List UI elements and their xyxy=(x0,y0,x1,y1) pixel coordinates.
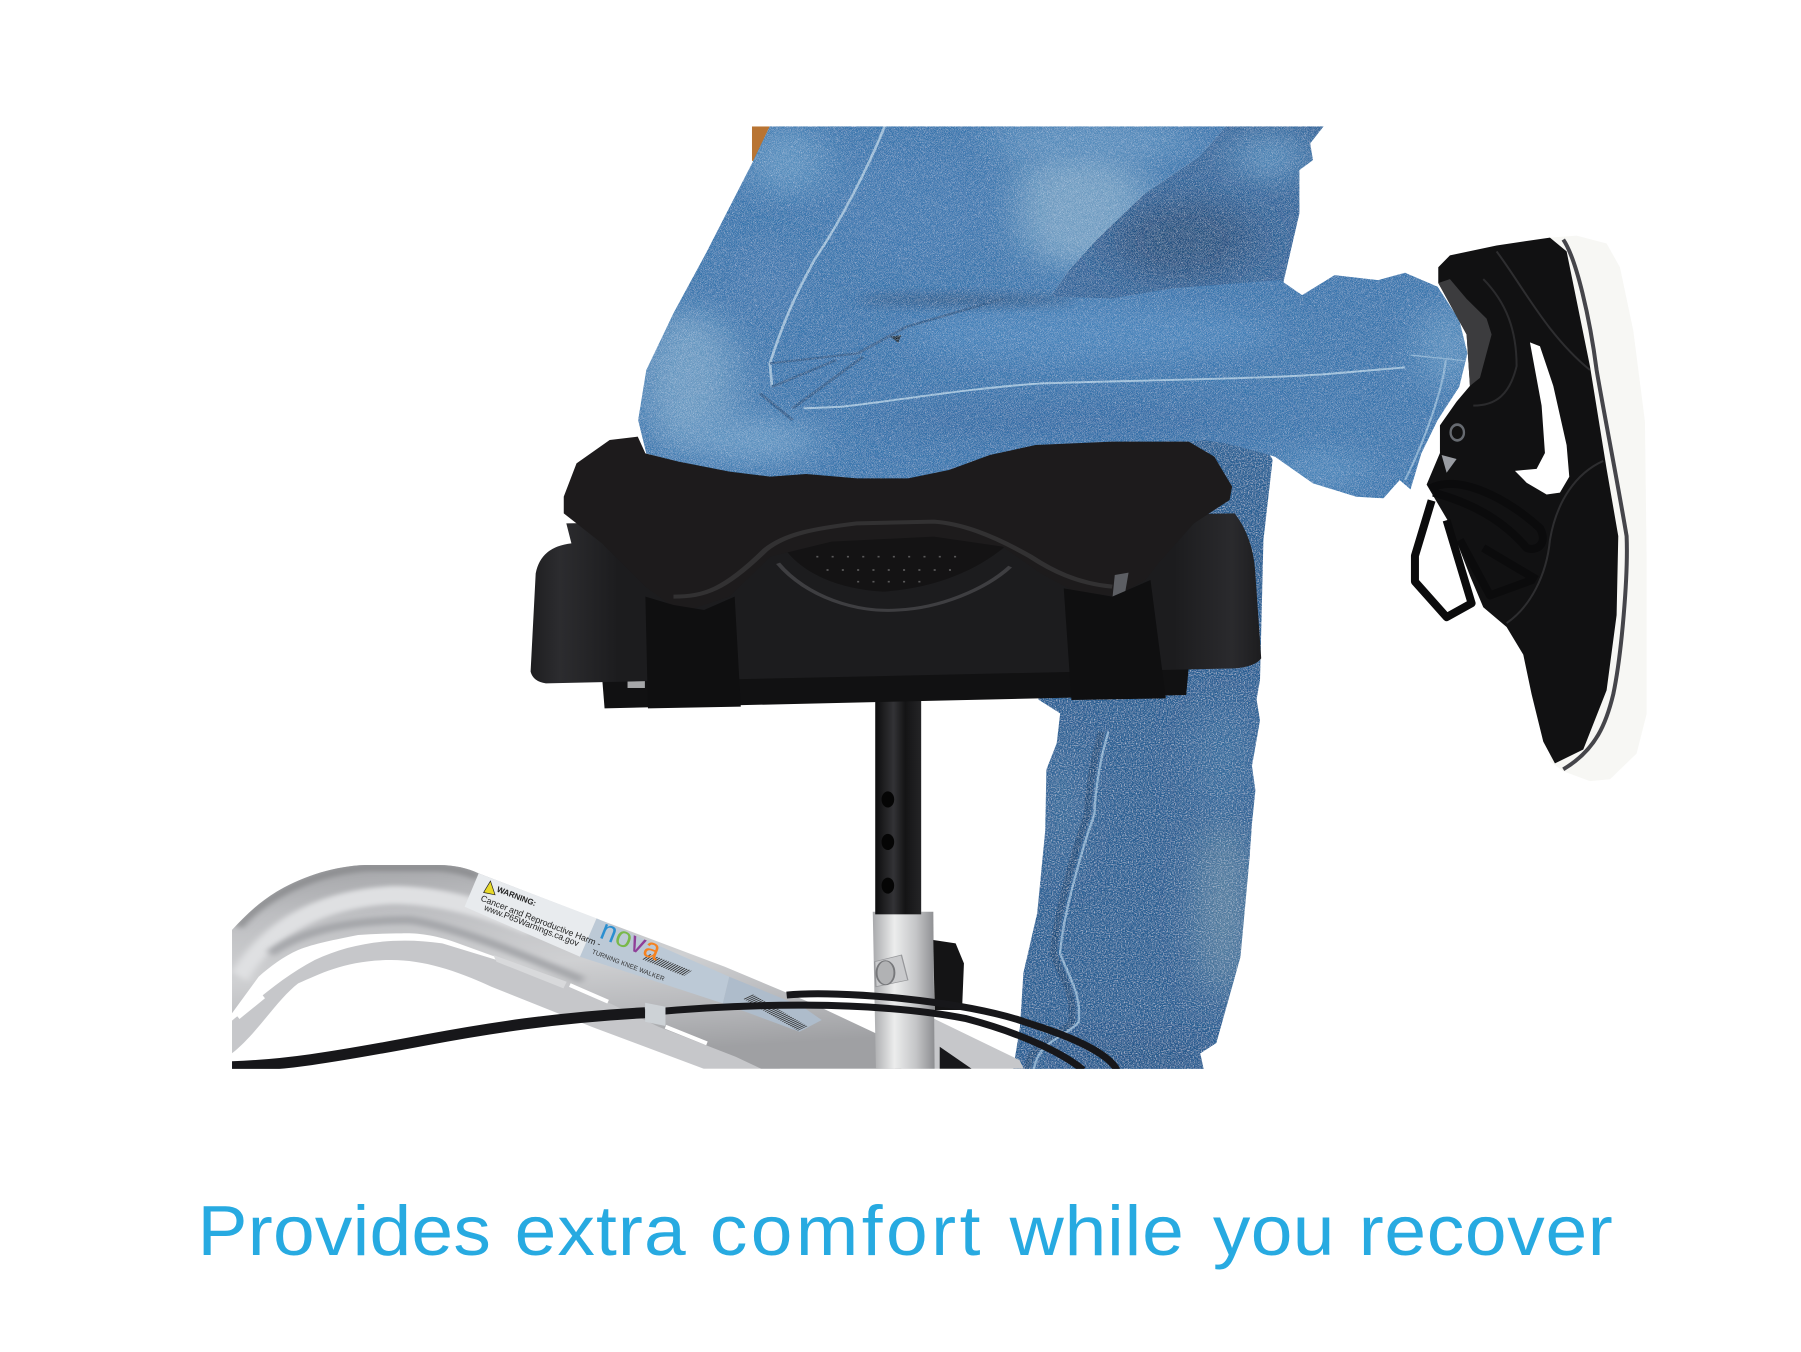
sole stripe xyxy=(1563,240,1627,769)
warning url: www.P65Warnings.ca.gov xyxy=(482,902,581,949)
skin sliver at top of leg xyxy=(752,126,771,161)
brake cables xyxy=(232,994,1117,1070)
photo: knee walker with padded seat cover and kneeling leg xyxy=(232,117,1647,1080)
inseam along shin xyxy=(803,367,1405,408)
caption: recover xyxy=(1359,1192,1613,1270)
tube slots xyxy=(238,985,707,1043)
caption: extra xyxy=(515,1192,687,1270)
cushion underside with perforations xyxy=(786,533,1005,592)
thigh seam xyxy=(770,126,885,387)
right strap xyxy=(1064,580,1166,700)
caption: comfort xyxy=(710,1192,984,1270)
eyelet xyxy=(1451,425,1464,440)
cushion top xyxy=(564,437,1232,610)
seat groove highlight xyxy=(778,563,1010,610)
perforation dots xyxy=(816,557,969,582)
seat base xyxy=(531,513,1261,683)
sleeve bracket xyxy=(875,955,908,987)
zipper xyxy=(673,522,1112,597)
weld tab xyxy=(493,955,567,988)
post adjustment holes xyxy=(882,791,894,894)
standing leg lower half in jeans xyxy=(1013,440,1272,1069)
laces xyxy=(1410,494,1476,622)
bolt xyxy=(877,961,894,985)
product name: TURNING KNEE WALKER xyxy=(591,949,666,983)
knee creases xyxy=(760,298,1004,420)
cable tie xyxy=(645,1003,665,1026)
seat post xyxy=(875,701,921,914)
zipper pull xyxy=(1112,573,1129,607)
sneaker xyxy=(1415,236,1647,781)
warning text: WARNING: xyxy=(495,885,537,908)
main tube xyxy=(232,865,901,1069)
caption: while xyxy=(1009,1192,1185,1270)
sock xyxy=(1438,279,1492,386)
label text xyxy=(479,881,666,983)
caption: Provides xyxy=(198,1192,491,1270)
barcode label xyxy=(723,977,822,1032)
silver sleeve xyxy=(873,912,935,1069)
barcode xyxy=(646,957,803,1028)
lower clip xyxy=(940,1047,972,1069)
tube gloss highlights xyxy=(238,867,583,980)
product label xyxy=(580,918,729,1003)
collar lining xyxy=(1473,279,1517,406)
black suede upper xyxy=(1427,238,1618,763)
lace eyelet tag xyxy=(1442,455,1457,473)
mounting plate xyxy=(602,667,1189,708)
white sole xyxy=(1550,236,1647,781)
caption: you xyxy=(1213,1192,1335,1270)
suede panel seams xyxy=(1497,251,1603,623)
warning icon xyxy=(484,881,495,895)
bracket plate xyxy=(232,941,780,1069)
warning detail: Cancer and Reproductive Harm - xyxy=(479,893,602,949)
bolt head xyxy=(628,681,645,688)
left strap xyxy=(645,597,741,708)
denim fading on the thigh xyxy=(1009,143,1150,270)
swoosh logo xyxy=(1515,342,1569,495)
shin shading xyxy=(901,303,1280,363)
plate right of sleeve xyxy=(896,1018,1024,1069)
brake knob xyxy=(933,940,964,1010)
warning label xyxy=(465,873,597,957)
nova logo: nova xyxy=(596,914,666,967)
padded seat and cushion cover xyxy=(531,437,1261,708)
cuff seam xyxy=(1405,355,1465,480)
upper thigh of standing leg, behind the knee xyxy=(1050,126,1324,298)
kneeling leg in jeans xyxy=(630,117,1481,503)
frame tube and bracket xyxy=(232,865,1117,1070)
